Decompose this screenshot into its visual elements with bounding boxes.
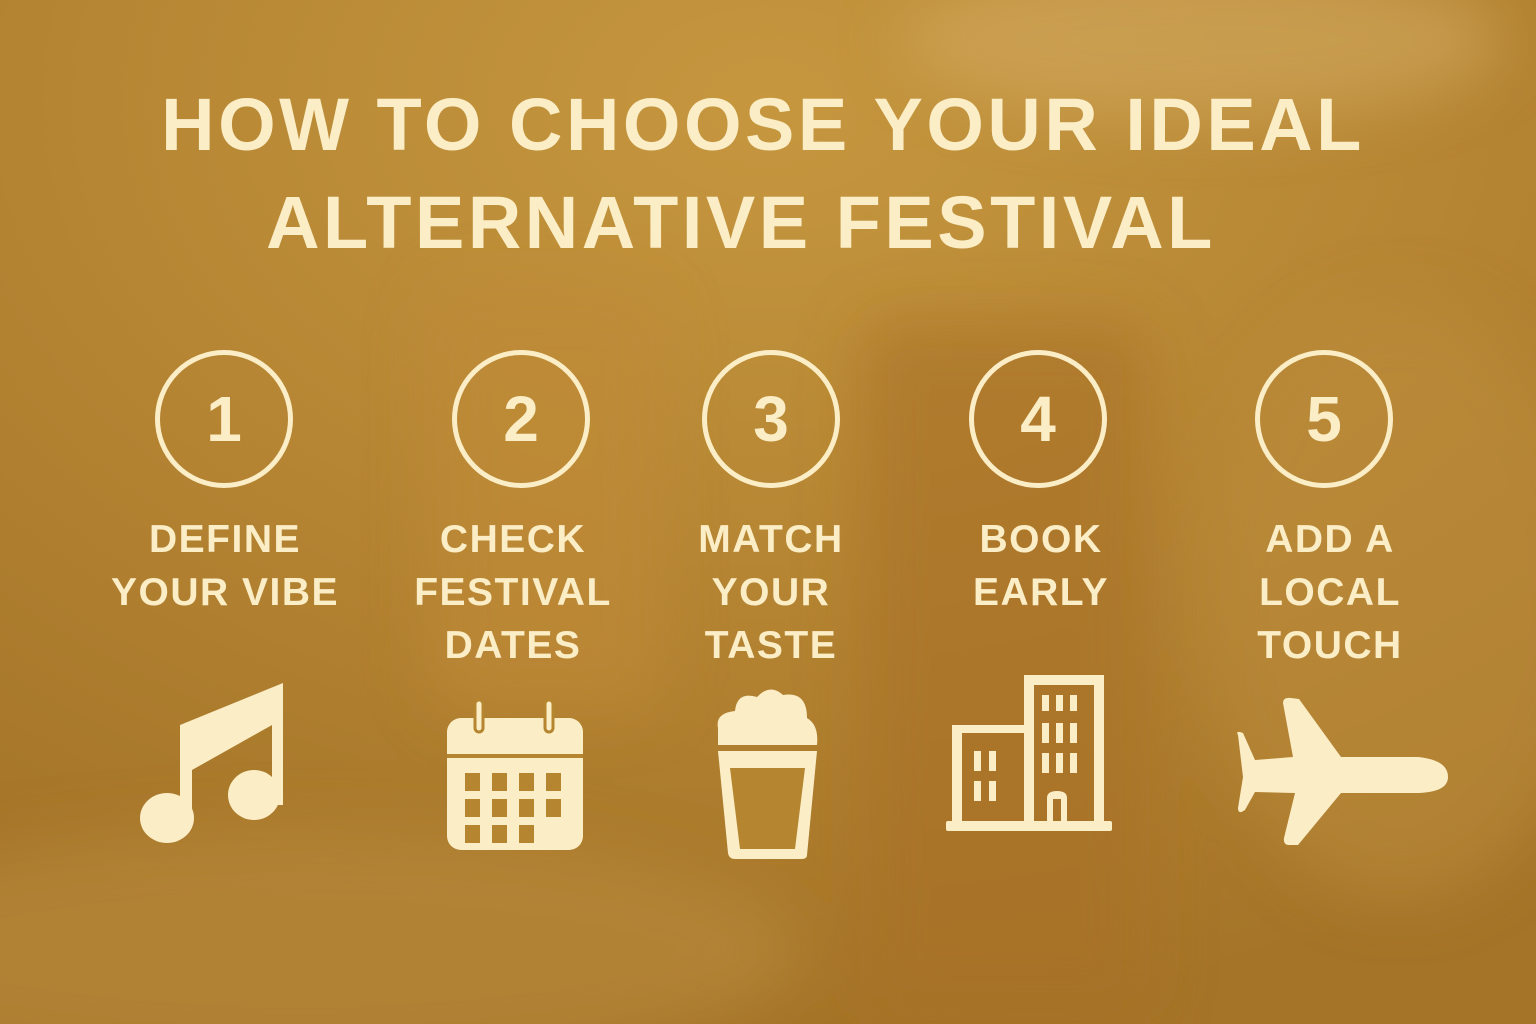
- step 4 label: BOOK: [980, 518, 1102, 561]
- step 3 number: [702, 350, 840, 488]
- step 1 number: 1: [206, 383, 242, 455]
- step 1 label: YOUR VIBE: [111, 571, 339, 614]
- step 2 label: DATES: [445, 624, 581, 667]
- icon: building: [946, 675, 1112, 831]
- step 4 label: [973, 518, 1109, 614]
- step 3 label: MATCH: [698, 518, 844, 561]
- step 3 label: YOUR: [712, 571, 830, 614]
- step 5 number: [1255, 350, 1393, 488]
- icon: music note: [140, 683, 1289, 845]
- step 5 number: 5: [1306, 383, 1342, 455]
- step 3 label: [698, 518, 844, 667]
- title: HOW TO CHOOSE YOUR IDEAL: [161, 83, 1365, 166]
- step 5 label: [1257, 518, 1403, 667]
- title: [161, 83, 1365, 264]
- step 3 number: 3: [753, 383, 789, 455]
- step 4 number: [969, 350, 1107, 488]
- step 5 label: TOUCH: [1257, 624, 1403, 667]
- step 2 label: FESTIVAL: [414, 571, 612, 614]
- step 1 label: DEFINE: [149, 518, 301, 561]
- step 2 label: [414, 518, 612, 667]
- icon: airplane: [1237, 698, 1448, 845]
- step 2 number: [452, 350, 590, 488]
- icon: beer glass: [718, 690, 818, 859]
- step 2 label: CHECK: [440, 518, 586, 561]
- step 2 number: 2: [503, 383, 539, 455]
- title: ALTERNATIVE FESTIVAL: [266, 181, 1216, 264]
- step 5 label: LOCAL: [1259, 571, 1401, 614]
- step 4 label: EARLY: [973, 571, 1109, 614]
- step 3 label: TASTE: [705, 624, 837, 667]
- step 1 label: [111, 518, 339, 614]
- step 4 number: 4: [1020, 383, 1056, 455]
- icon: calendar: [447, 702, 583, 850]
- step 1 number: [155, 350, 293, 488]
- step 5 label: ADD A: [1265, 518, 1395, 561]
